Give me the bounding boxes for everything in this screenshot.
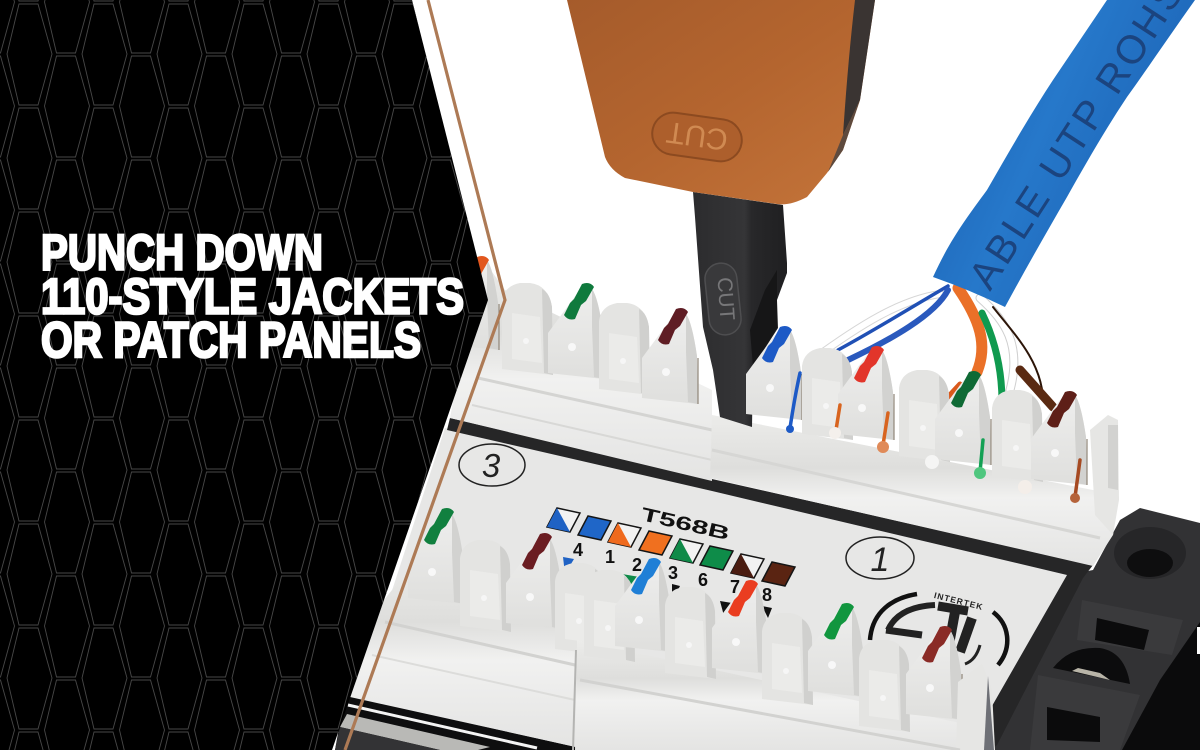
photo: labelled plate [340,418,1093,750]
photo: lower left punch block [335,508,606,750]
pin numbers: 3 [668,563,678,583]
photo: connected wires [812,286,1053,407]
port number 3: 3 [482,447,501,484]
photo: blue cable [933,0,1195,307]
pin numbers: 4 [573,540,583,560]
title [41,224,464,368]
port number 1 [846,537,914,579]
CUT mark on blade [703,262,743,336]
photo: upper right punch teeth [712,326,1119,538]
photo: punch-down tool handle [567,0,875,204]
hexagon texture [0,0,488,750]
CUT mark on handle: CUT [664,115,730,156]
pin numbers: 6 [698,570,708,590]
pin numbers [573,540,772,605]
CUT mark on blade: CUT [713,276,738,321]
pin numbers: 2 [632,555,642,575]
pin numbers: 7 [730,577,740,597]
T568B label: T568B [639,504,731,545]
photo: upper left punch block [443,255,712,481]
upper socket [1077,600,1183,655]
photo: upper right block body [710,415,1118,566]
screw recess [1053,648,1130,684]
port number 3 [459,444,525,486]
pin numbers: 1 [605,547,615,567]
mounting hole [1114,527,1186,579]
FTL certification logo [870,590,1007,665]
bronze chevron line [345,0,505,750]
photo: lower right punch block [573,558,995,750]
FTL certification logo: INTERTEK [933,590,984,612]
title: OR PATCH PANELS [41,312,421,368]
black chevron panel [0,0,488,750]
pin numbers: 8 [762,585,772,605]
title: 110-STYLE JACKETS [41,268,464,324]
T568B colour swatches [547,508,795,586]
wire tails [790,373,1080,497]
port number 1: 1 [871,541,889,579]
lower swatch row, mostly hidden [563,557,772,618]
CUT mark on handle [650,110,744,164]
title: PUNCH DOWN [41,224,323,280]
lower socket [1030,675,1140,750]
photo: terminal block [990,508,1200,750]
photo: punch-down tool blade [693,192,787,427]
